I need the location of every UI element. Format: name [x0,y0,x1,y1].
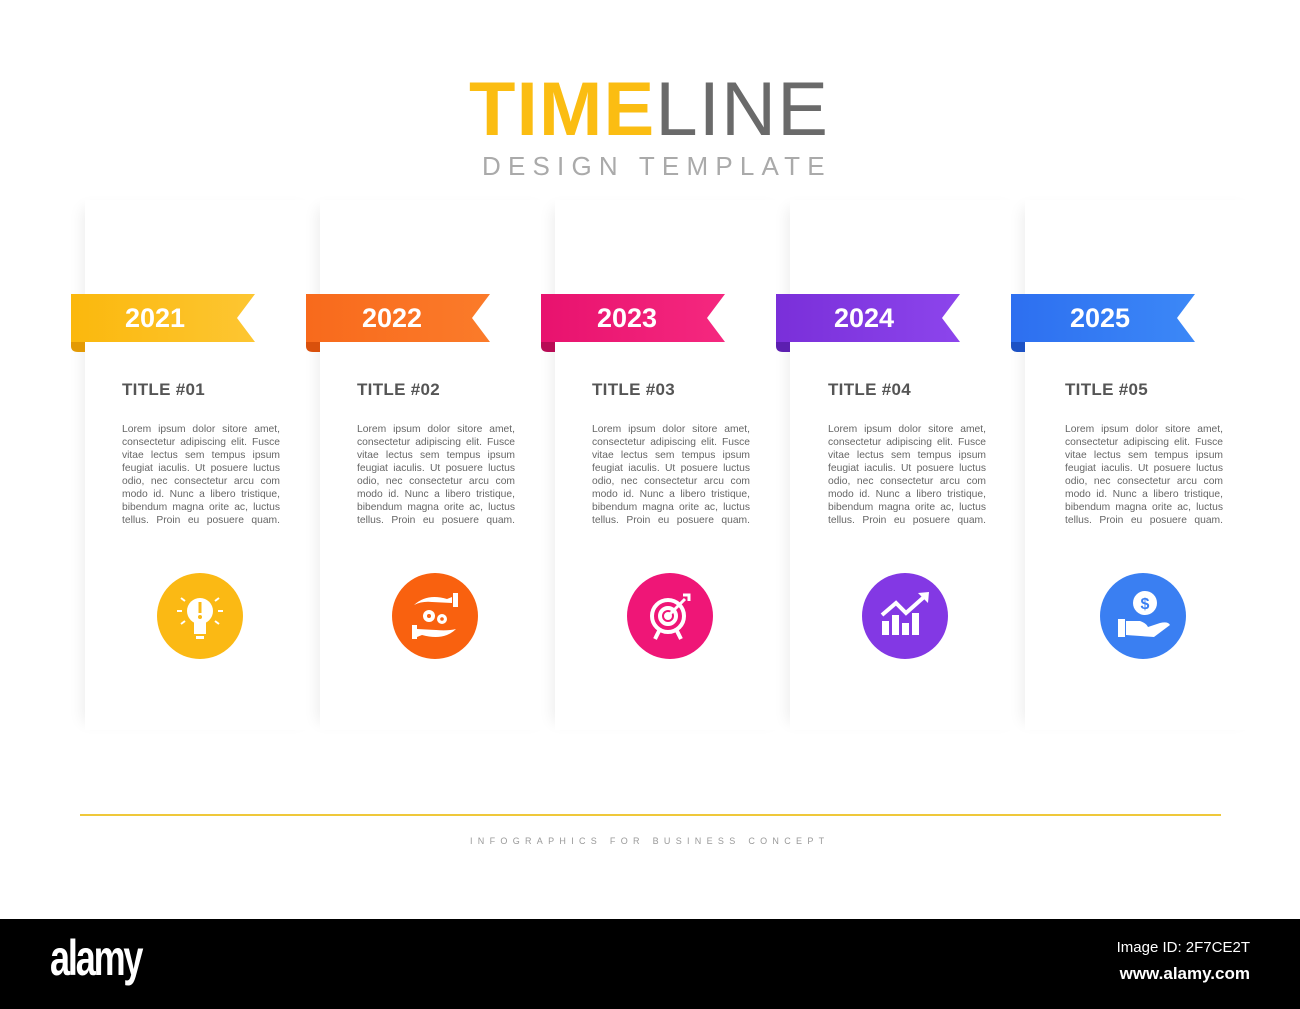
url: www.alamy.com [1120,964,1250,983]
heading 1: TITLE #01 [122,380,205,399]
panel: 2025 [1025,200,1260,730]
logo: alamy [50,930,141,986]
year 2021: 2021 [125,303,185,333]
text 4: Lorem ipsum dolor sitore amet, consectetur adipiscing elit. Fusce vitae lectus sem tempus ipsum feugiat iaculis. Ut posuere luctus odio, nec consectetur arcu com modo id. Nunc a libero tristique, bibendum magna orite ac, luctus tellus. Proin eu posuere quam. [828,424,986,526]
ribbon 2024 [776,294,960,352]
year 2022: 2022 [362,303,422,333]
ribbons [71,294,1195,352]
footer bar [0,919,1300,1009]
year 2025: 2025 [1070,303,1130,333]
panel: 2021 [85,200,320,730]
footer caption: INFOGRAPHICS FOR BUSINESS CONCEPT [470,836,829,846]
image id: Image ID: 2F7CE2T [1117,939,1250,956]
ribbon 2022 [306,294,490,352]
text 3: Lorem ipsum dolor sitore amet, consectetur adipiscing elit. Fusce vitae lectus sem tempus ipsum feugiat iaculis. Ut posuere luctus odio, nec consectetur arcu com modo id. Nunc a libero tristique, bibendum magna orite ac, luctus tellus. Proin eu posuere quam. [592,424,750,526]
title: TIMELINE [469,67,829,152]
ribbon 2021 [71,294,255,352]
ribbon 2023 [541,294,725,352]
panel: 2023 [555,200,790,730]
icon: target [627,573,713,659]
heading 2: TITLE #02 [357,380,440,399]
year 2023: 2023 [597,303,657,333]
heading 4: TITLE #04 [828,380,911,399]
icon: growth chart [862,573,948,659]
divider line [80,814,1221,816]
panel: 2024 [790,200,1025,730]
heading 5: TITLE #05 [1065,380,1148,399]
icon: hand with coin: $ [1141,596,1150,613]
year 2024: 2024 [834,303,894,333]
text 2: Lorem ipsum dolor sitore amet, consectetur adipiscing elit. Fusce vitae lectus sem tempus ipsum feugiat iaculis. Ut posuere luctus odio, nec consectetur arcu com modo id. Nunc a libero tristique, bibendum magna orite ac, luctus tellus. Proin eu posuere quam. [357,424,515,526]
ribbon 2025 [1011,294,1195,352]
subtitle: DESIGN TEMPLATE [482,151,832,181]
icon: hand with coin [1100,573,1186,659]
icon: light bulb [157,573,243,659]
heading 3: TITLE #03 [592,380,675,399]
text 1: Lorem ipsum dolor sitore amet, consectetur adipiscing elit. Fusce vitae lectus sem tempus ipsum feugiat iaculis. Ut posuere luctus odio, nec consectetur arcu com modo id. Nunc a libero tristique, bibendum magna orite ac, luctus tellus. Proin eu posuere quam. [122,424,280,526]
text 5: Lorem ipsum dolor sitore amet, consectetur adipiscing elit. Fusce vitae lectus sem tempus ipsum feugiat iaculis. Ut posuere luctus odio, nec consectetur arcu com modo id. Nunc a libero tristique, bibendum magna orite ac, luctus tellus. Proin eu posuere quam. [1065,424,1223,526]
icon: hands with gears [392,573,478,659]
panel: 2022 [320,200,555,730]
